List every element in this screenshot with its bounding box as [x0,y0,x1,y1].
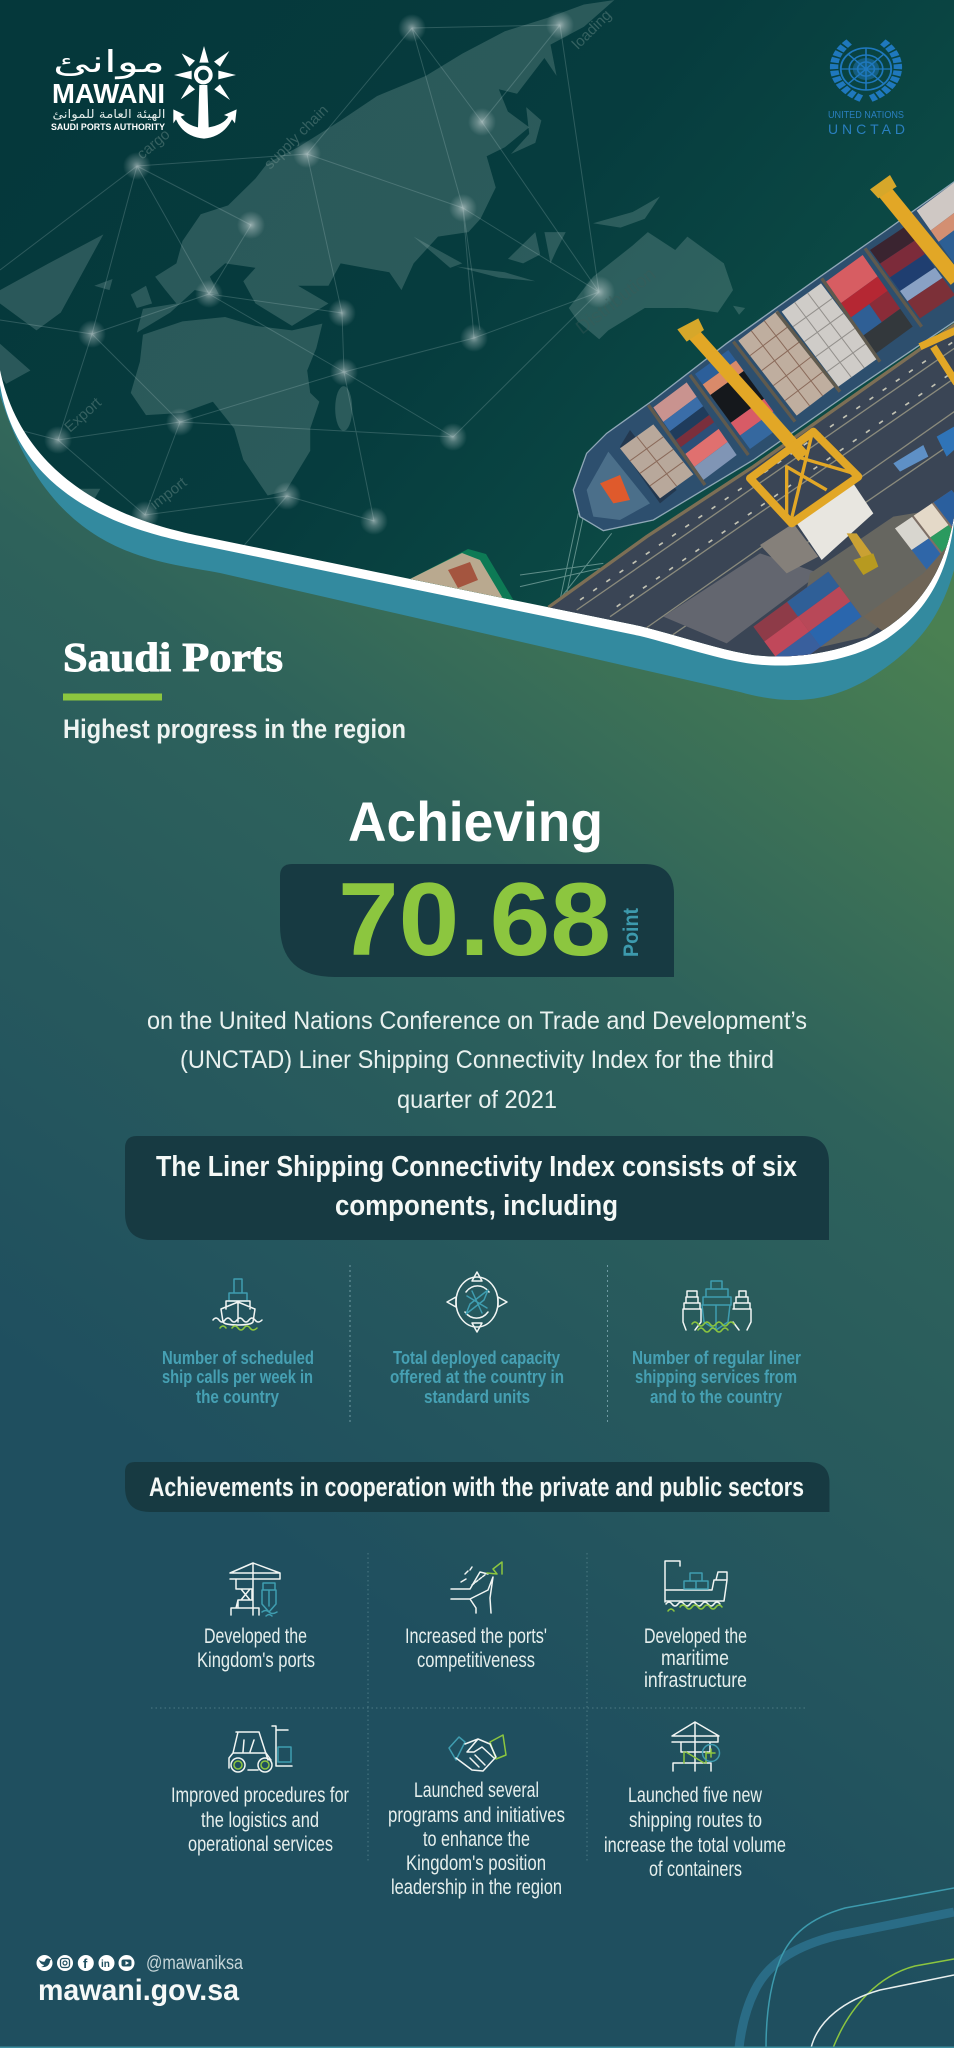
achievement: logistics procedures [171,1726,349,1856]
icon: compass [447,1272,507,1332]
achievement: logistics procedures: the logistics and [201,1809,319,1832]
achievement: programs and initiatives: to enhance the [423,1828,530,1851]
mooring lines [520,513,612,600]
yard containers [754,572,862,656]
container bays [620,181,954,498]
green accent bar [63,694,162,700]
icon: anchor with rays [173,46,237,139]
achievements grid dividers [151,1553,805,1863]
map watermark words: Distribution [572,264,660,339]
icon: port crane with ship [230,1563,280,1616]
score panel [280,862,674,978]
achievement: Kingdom's ports: Kingdom's ports [197,1649,315,1672]
component: liner services: and to the country [650,1387,782,1407]
world map [0,0,745,504]
panel: index heading: components, including [335,1190,618,1222]
icon: linkedin [98,1955,114,1971]
logo wordmark: MAWANI [52,78,165,109]
UNCTAD logo: UNCTAD [828,121,905,137]
icon: crane with plus [672,1722,720,1771]
achievement: logistics procedures: operational services [188,1833,333,1856]
achievement: programs and initiatives [388,1735,565,1899]
achievement: new shipping routes: of containers [649,1858,742,1881]
bay beams [648,248,922,485]
teal curved band [0,0,954,700]
achievement: programs and initiatives: leadership in the region [391,1876,562,1899]
icon: forklift [229,1726,292,1772]
map watermark words: import [147,474,191,513]
icon: handshake [449,1735,506,1771]
component: deployed capacity: standard units [424,1387,530,1407]
footer social handles [36,1953,243,1974]
achievement: new shipping routes: increase the total volume [604,1834,786,1857]
achievement: new shipping routes [604,1722,786,1881]
container ship and port photo [520,175,954,673]
blue truck [893,427,954,472]
Mawani logo [51,45,237,139]
icon: cargo ship and crane [665,1561,727,1611]
achievement: competitiveness [405,1562,547,1672]
logo wordmark: موانئ [53,45,165,80]
website: mawani.gov.sa [38,1974,239,2007]
panel: index heading [125,1136,829,1240]
achievement: new shipping routes: Launched five new [628,1784,763,1807]
white curved edge [0,0,954,666]
achievement: Kingdom's ports: Developed the [204,1625,307,1648]
yellow cranes [690,190,954,525]
quay [548,335,954,656]
UNCTAD logo: UNITED NATIONS [828,110,904,121]
icon: twitter [36,1955,52,1971]
achievement: maritime infrastructure: infrastructure [644,1669,747,1692]
panel: index heading: The Liner Shipping Connectivity Index consists of six [156,1151,797,1183]
map watermark words: cargo [134,126,173,163]
achievement: maritime infrastructure: Developed the [644,1625,747,1648]
icon: hand with rising arrow [451,1562,502,1613]
logo wordmark: SAUDI PORTS AUTHORITY [51,122,165,132]
component: scheduled ship calls: Number of scheduled [162,1348,314,1368]
icon: youtube [118,1955,134,1971]
achievement: competitiveness: Increased the ports' [405,1625,547,1648]
map watermark words: loading [569,7,615,53]
handle text: @mawaniksa [146,1953,243,1974]
component: deployed capacity: Total deployed capacity [393,1348,560,1368]
map watermark words: supply chain [261,102,332,173]
decorative footer curves [739,1888,954,2048]
panel: achievements heading [125,1462,830,1512]
component: scheduled ship calls: ship calls per week in [162,1367,313,1387]
icon: ships and containers [683,1281,751,1332]
achievement: programs and initiatives: Launched several [414,1779,539,1802]
component: scheduled ship calls: the country [196,1387,279,1407]
small green ship [410,549,514,600]
panel: achievements heading: Achievements in cooperation with the private and public sectors [149,1472,804,1502]
component: deployed capacity [390,1272,564,1407]
component: scheduled ship calls [162,1279,314,1407]
achievement: logistics procedures: Improved procedures for [171,1784,349,1807]
icon: UN emblem [834,42,898,99]
intro paragraph: (UNCTAD) Liner Shipping Connectivity Index for the third [180,1046,774,1074]
achievement: competitiveness: competitiveness [417,1649,535,1672]
column dividers [350,1265,608,1423]
subheading: Highest progress in the region [63,714,406,744]
score number: 70.68 [338,862,611,978]
logo wordmark: الهيئة العامة للموانئ [52,107,166,122]
network nodes [44,11,615,535]
component: deployed capacity: offered at the country in [390,1367,564,1387]
network lines [0,25,599,550]
achievement: new shipping routes: shipping routes to [629,1809,762,1832]
icon: instagram [57,1955,73,1971]
icon: ship [213,1279,262,1330]
bottom edge line [0,2046,954,2048]
heading: Achieving: Achieving [348,790,603,853]
icon: facebook [78,1955,94,1971]
logo wordmark [51,45,166,132]
achievement: Kingdom's ports [197,1563,315,1672]
intro paragraph: quarter of 2021 [397,1086,557,1114]
icon: facebook: f [83,1956,88,1971]
icon: linkedin: in [101,1959,110,1970]
ship hull [573,180,954,531]
achievement: maritime infrastructure: maritime [661,1647,729,1670]
score unit: Point [620,908,643,957]
map watermark words: Export [61,394,106,436]
component: liner services: Number of regular liner [632,1348,801,1368]
achievement: programs and initiatives: programs and initiatives [388,1804,565,1827]
achievement: maritime infrastructure [644,1561,747,1692]
map watermark words [61,7,660,513]
achievement: programs and initiatives: Kingdom's position [406,1852,546,1875]
UNCTAD logo [828,42,905,137]
intro paragraph: on the United Nations Conference on Trade and Development’s [147,1007,807,1035]
component: liner services: shipping services from [635,1367,797,1387]
white spreader [797,483,873,560]
intro paragraph [147,1007,807,1114]
hero panel: world map and ship photo [0,0,954,680]
heading: Saudi Ports: Saudi Ports [63,634,283,680]
component: liner services [632,1281,801,1407]
